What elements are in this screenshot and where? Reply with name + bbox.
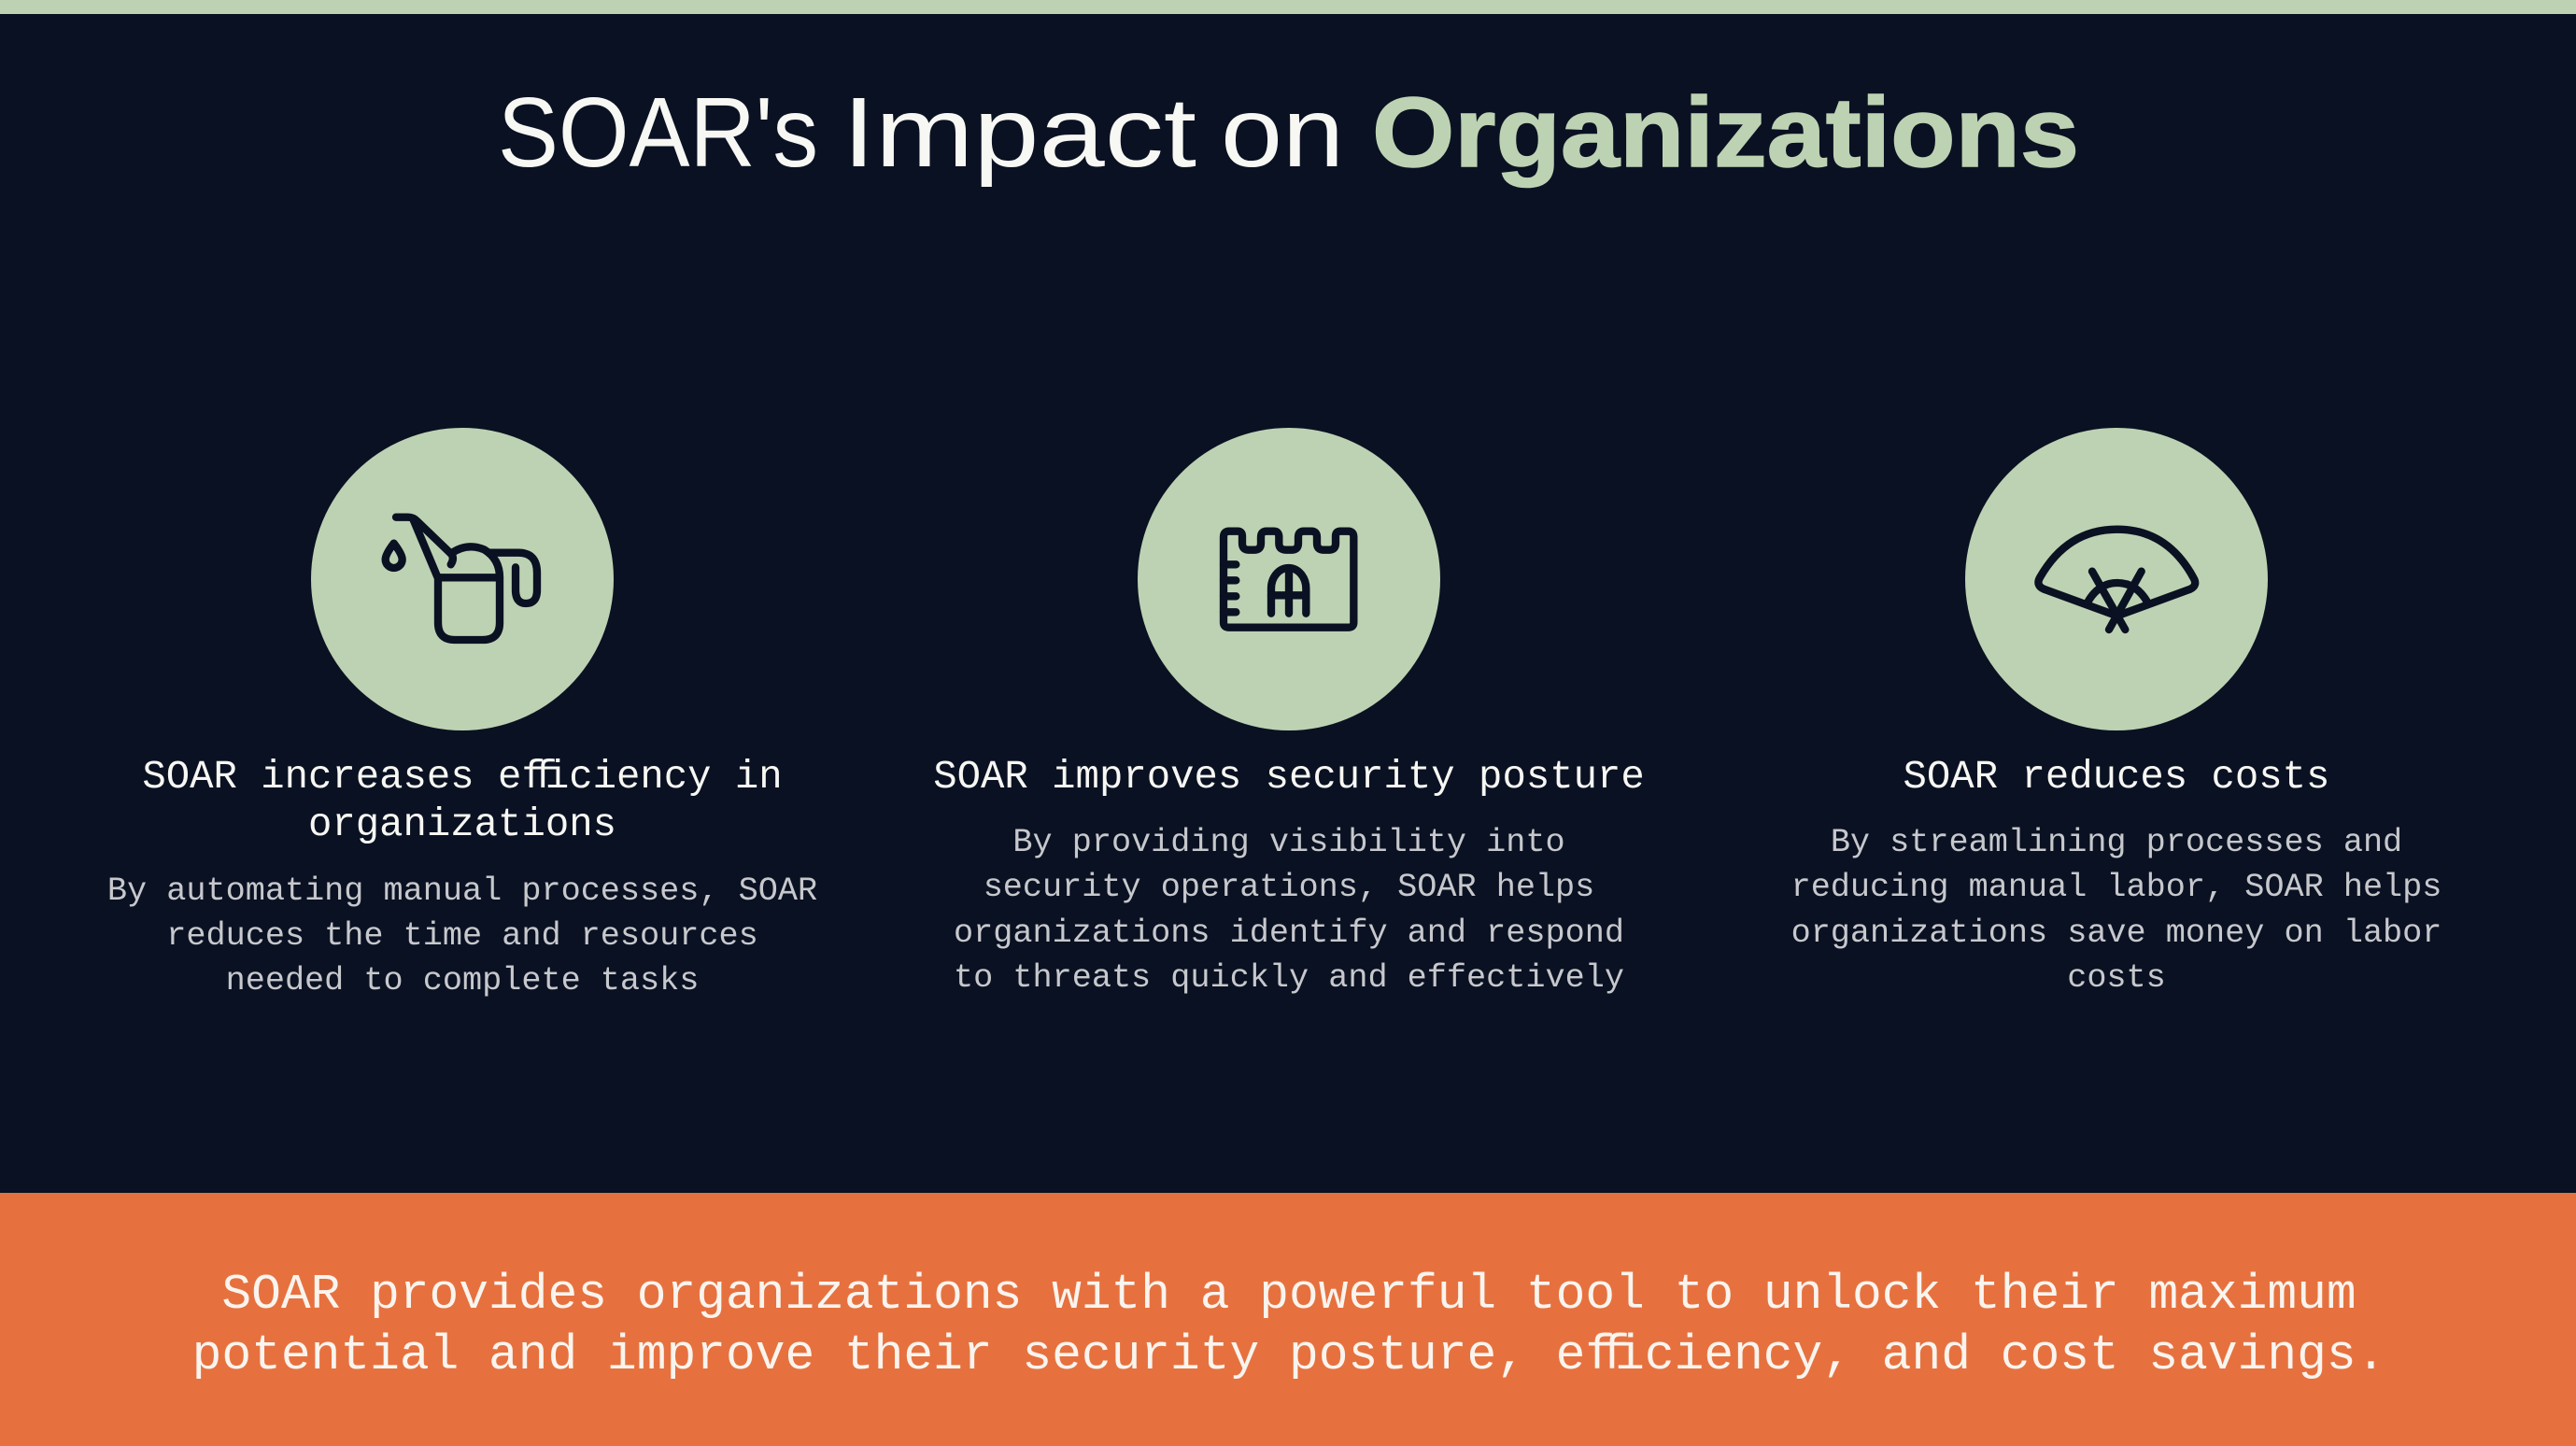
- text: efficiency detail: reduces the time and resources: [166, 917, 758, 955]
- title: on: [1221, 78, 1344, 188]
- panel: costs: [1791, 428, 2442, 997]
- panel: efficiency: [107, 428, 817, 999]
- icon: castle wall: [1138, 428, 1440, 730]
- heading: efficiency: organizations: [308, 802, 616, 847]
- heading: security: SOAR improves security posture: [933, 755, 1645, 800]
- title: SOAR's: [498, 78, 818, 188]
- text: security detail: organizations identify and respond: [954, 914, 1624, 952]
- text: costs detail: By streamlining processes and: [1831, 824, 2402, 861]
- title: Organizations: [1372, 78, 2079, 188]
- text: security detail: By providing visibility into: [1012, 824, 1565, 861]
- text: security detail: to threats quickly and effectively: [954, 959, 1624, 997]
- banner text: SOAR provides organizations with a powerful tool to unlock their maximum: [221, 1267, 2357, 1323]
- text: efficiency detail: needed to complete tasks: [226, 962, 699, 999]
- text: security detail: security operations, SOAR helps: [984, 869, 1594, 906]
- heading: costs: SOAR reduces costs: [1904, 755, 2329, 800]
- text: efficiency detail: By automating manual processes, SOAR: [107, 872, 817, 910]
- title: [498, 78, 2079, 188]
- heading: efficiency: SOAR increases efficiency in: [142, 755, 783, 800]
- icon: fan: [1965, 428, 2268, 730]
- text: costs detail: costs: [2067, 959, 2166, 997]
- banner text: potential and improve their security posture, efficiency, and cost savings.: [192, 1327, 2385, 1383]
- panel: security posture: [933, 428, 1645, 997]
- text: costs detail: reducing manual labor, SOAR helps: [1791, 869, 2442, 906]
- text: costs detail: organizations save money on labor: [1791, 914, 2442, 952]
- icon: oil can: [311, 428, 614, 730]
- title: Impact: [842, 78, 1196, 188]
- footer banner: [0, 1193, 2576, 1446]
